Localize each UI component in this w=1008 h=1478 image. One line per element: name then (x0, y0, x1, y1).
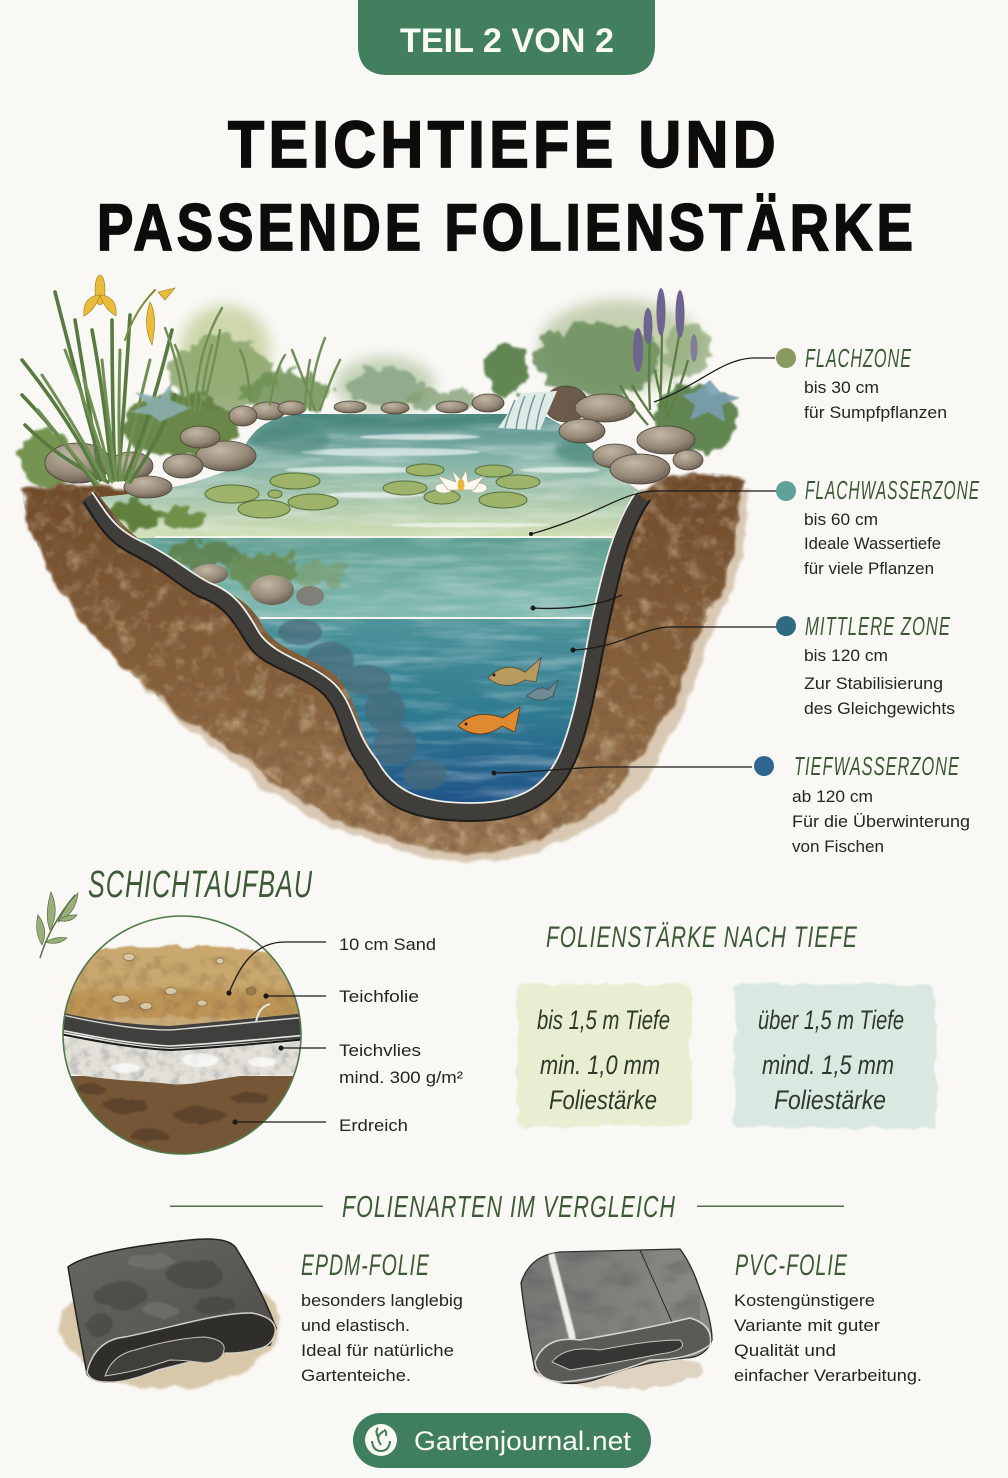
zone label: Mittlere Zone: des Gleichgewichts (804, 699, 955, 718)
fish (458, 658, 558, 734)
rocks (45, 386, 703, 498)
heading: Folienarten im Vergleich: FOLIENARTEN IM VERGLEICH (342, 1189, 676, 1224)
text: EPDM (301, 1249, 463, 1385)
text: EPDM: EPDM-FOLIE (301, 1249, 430, 1282)
text: EPDM: Gartenteiche. (301, 1366, 411, 1385)
iris flowers (84, 275, 175, 345)
zone label: Flachzone: bis 30 cm (804, 378, 879, 397)
footer badge (353, 1413, 651, 1468)
left iris and grasses (22, 290, 340, 485)
illustration: PVC roll (521, 1249, 712, 1388)
card: over 1.5 m: mind. 1,5 mm (762, 1050, 894, 1080)
zone label: Tiefwasserzone: ab 120 cm (792, 787, 873, 806)
pond liner (84, 492, 650, 821)
illustration: EPDM roll (62, 1239, 278, 1387)
water lilies (205, 464, 540, 518)
card: up to 1.5 m: Foliestärke (549, 1085, 657, 1115)
illustration: pond cross-section (19, 275, 778, 862)
zone label: Tiefwasserzone: Für die Überwinterung (792, 812, 970, 831)
submerged plants (169, 541, 346, 588)
layer labels: Teichvlies (339, 1041, 421, 1060)
card: up to 1.5 m: bis 1,5 m Tiefe (537, 1005, 670, 1035)
card: up to 1.5 m (517, 984, 691, 1126)
text: EPDM: und elastisch. (301, 1316, 410, 1335)
card: up to 1.5 m: min. 1,0 mm (540, 1050, 660, 1080)
text: PVC: Qualität und (734, 1341, 836, 1360)
card: over 1.5 m: über 1,5 m Tiefe (758, 1005, 904, 1035)
soil layer (71, 1076, 293, 1154)
diagram pointers (226, 942, 326, 1125)
submerged rocks (250, 575, 294, 605)
soil body (20, 473, 752, 862)
callout lines (492, 358, 778, 776)
icon: leaf sprig (37, 892, 78, 958)
zone label: Flachwasserzone: bis 60 cm (804, 510, 878, 529)
layer labels: 10 cm Sand (339, 935, 436, 954)
text: PVC: Kostengünstigere (734, 1291, 875, 1310)
zone label: Mittlere Zone: bis 120 cm (804, 646, 888, 665)
blue-green leaves (130, 380, 740, 422)
title (97, 107, 917, 264)
text: PVC (734, 1249, 922, 1385)
waterfall (498, 391, 557, 430)
zone label: Flachzone (776, 343, 947, 422)
heading: Folienstärke nach Tiefe: FOLIENSTÄRKE NACH TIEFE (546, 921, 858, 954)
text: EPDM: Ideal für natürliche (301, 1341, 454, 1360)
water layers (90, 410, 650, 810)
zone label: Flachwasserzone: Ideale Wassertiefe (804, 534, 941, 553)
zone label: Tiefwasserzone: von Fischen (792, 837, 884, 856)
zone label: Tiefwasserzone (754, 751, 970, 856)
text: PVC: Variante mit guter (734, 1316, 880, 1335)
text: EPDM: besonders langlebig (301, 1291, 463, 1310)
layer labels: Erdreich (339, 1116, 408, 1135)
zone label: Flachwasserzone: für viele Pflanzen (804, 559, 934, 578)
layer labels: Teichfolie (339, 987, 419, 1006)
footer badge: Gartenjournal.net (414, 1426, 632, 1456)
card: over 1.5 m: Foliestärke (774, 1085, 886, 1115)
background foliage (19, 300, 737, 490)
zone dividers (155, 536, 650, 538)
header tab: part indicator (358, 0, 655, 75)
zone label: Flachzone: FLACHZONE (805, 343, 912, 373)
title: TEICHTIEFE UND (228, 107, 780, 181)
fleece layer (64, 1038, 300, 1084)
liner layer (64, 1014, 300, 1048)
zone label: Flachwasserzone (776, 475, 980, 578)
card: over 1.5 m (734, 984, 936, 1128)
sand layer (50, 945, 320, 1018)
heading: Schichtaufbau: SCHICHTAUFBAU (88, 864, 313, 906)
zone label: Flachzone: für Sumpfpflanzen (804, 403, 947, 422)
shore plants above the divider (105, 502, 211, 528)
lavender (620, 288, 698, 425)
layer labels: mind. 300 g/m² (339, 1068, 463, 1087)
reflections (285, 434, 600, 528)
zone label: Mittlere Zone: Zur Stabilisierung (804, 674, 943, 693)
text: PVC: PVC-FOLIE (735, 1249, 848, 1282)
header tab: part indicator: TEIL 2 VON 2 (400, 22, 614, 60)
zone label: Mittlere Zone (776, 611, 955, 718)
text: PVC: einfacher Verarbeitung. (734, 1366, 922, 1385)
icon: seedling (372, 1428, 390, 1451)
layer labels (339, 935, 463, 1135)
diagram: layer cross-section lens (50, 916, 326, 1160)
